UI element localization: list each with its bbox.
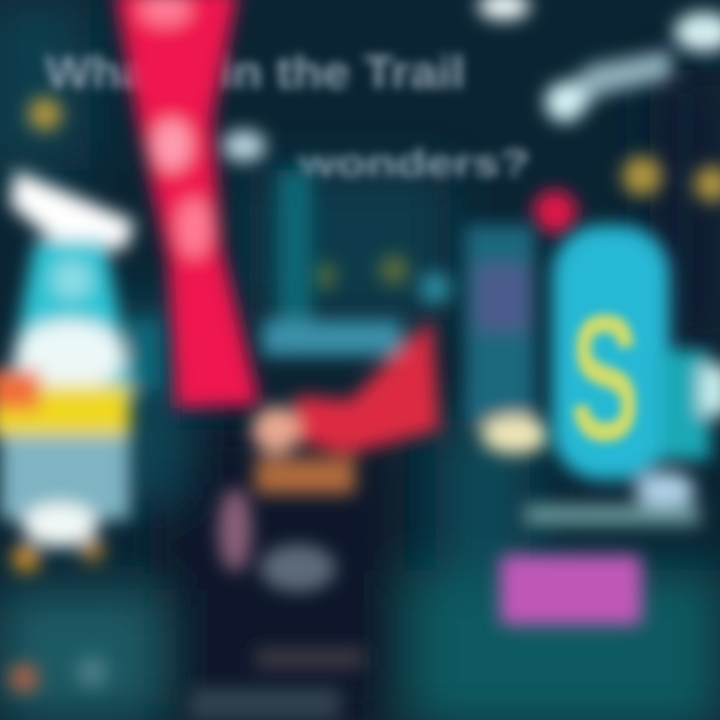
title: wonders?: [297, 143, 530, 185]
top right white shapes: [222, 0, 720, 162]
gold dots: [28, 97, 720, 289]
title: What's in the Trail: [45, 46, 465, 98]
left figure: [0, 170, 160, 693]
red ribbon: [115, 0, 260, 408]
red dot: [533, 190, 577, 234]
dollar sign: S: [570, 278, 640, 479]
title: [45, 46, 530, 185]
right middle panel: [419, 225, 549, 454]
dollar bottle: [500, 225, 720, 625]
center chart: [190, 170, 440, 720]
